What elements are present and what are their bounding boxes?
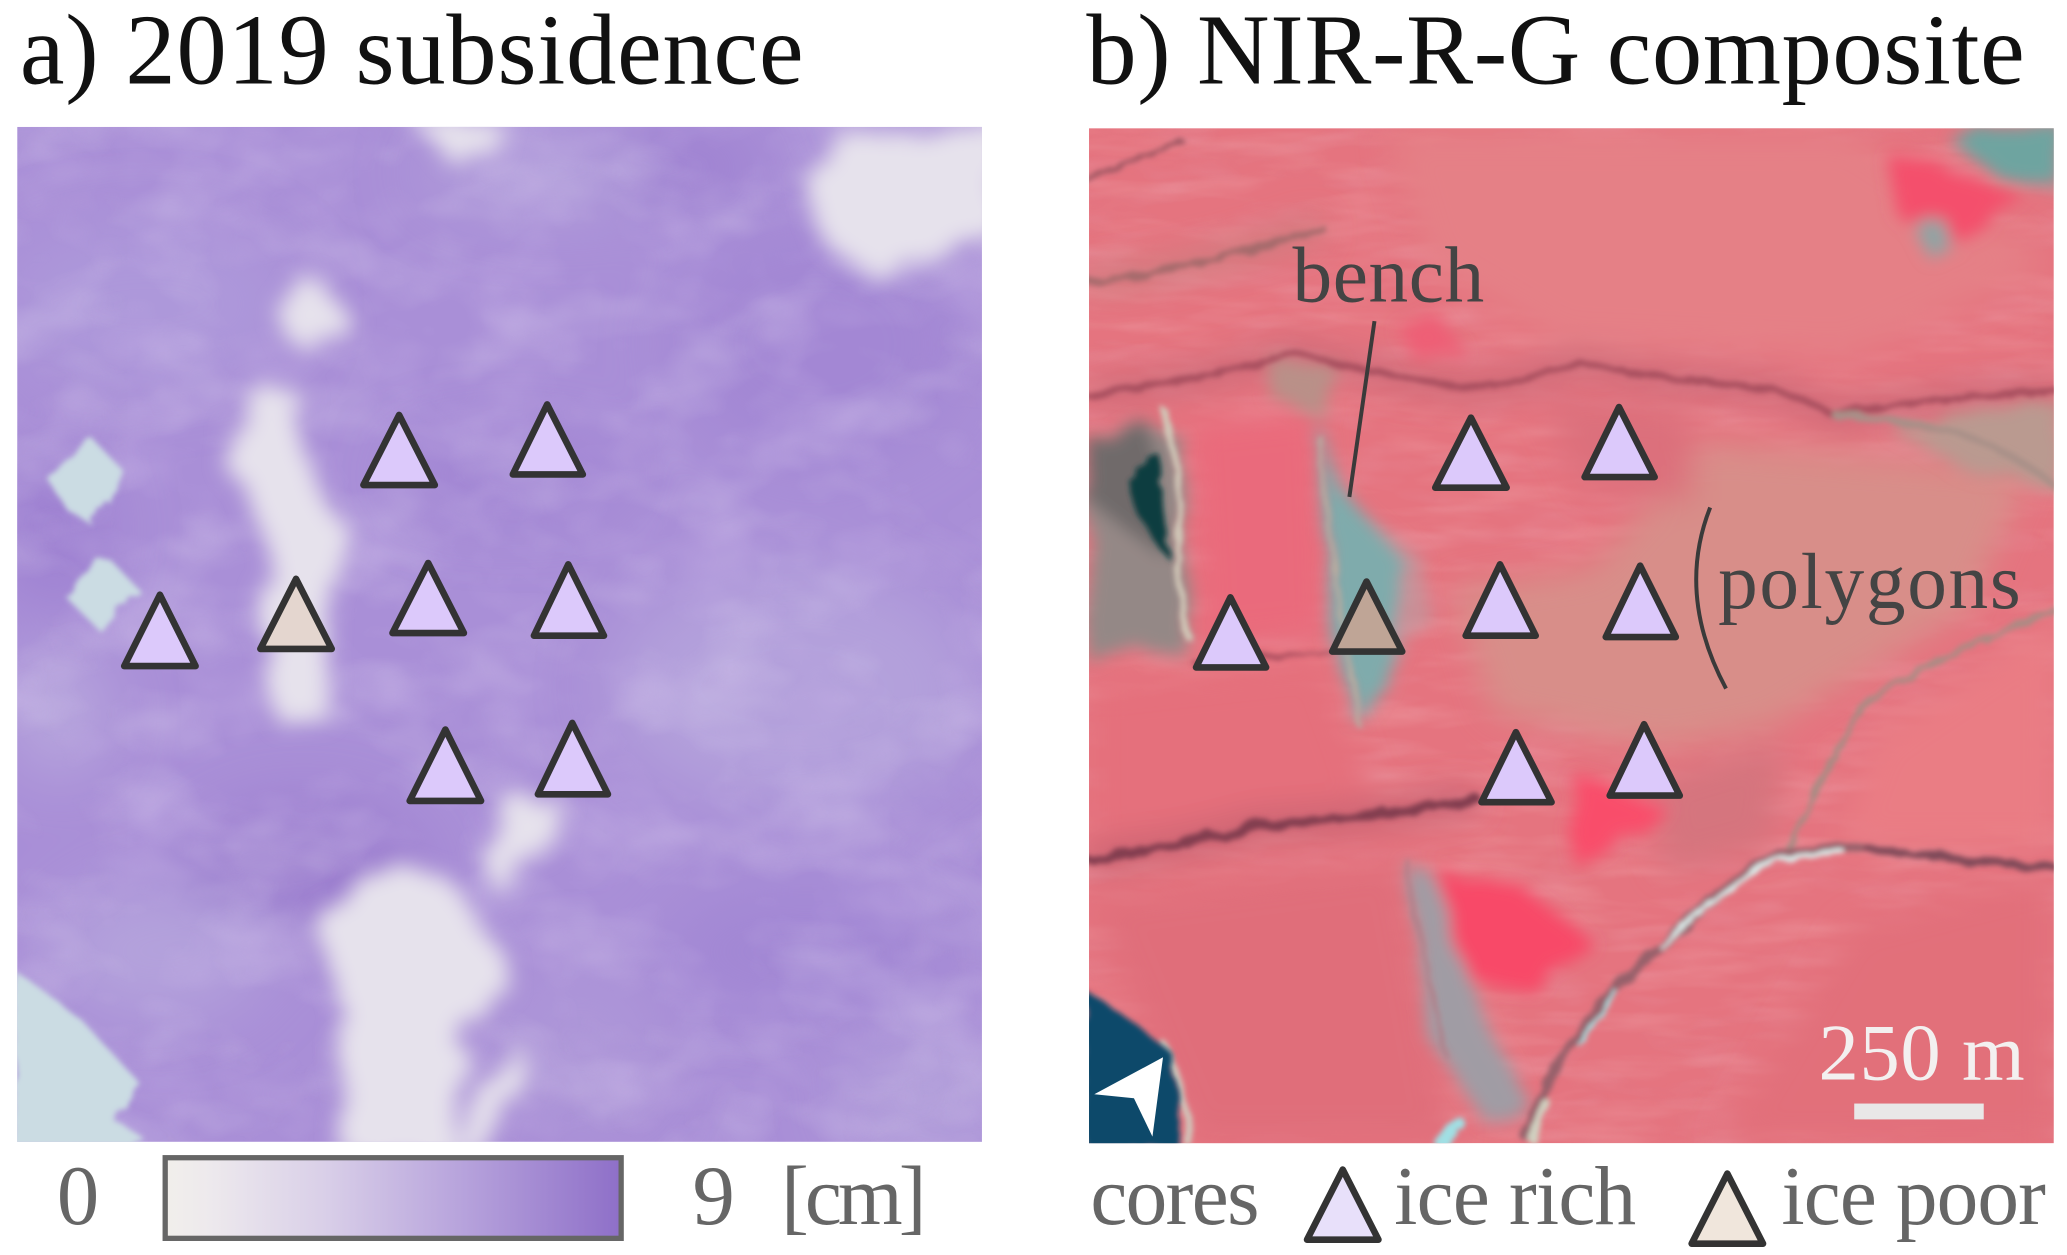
white patch: top right <box>801 106 1004 280</box>
dark band beneath the ridge and lower gully <box>1086 352 2062 415</box>
legend label: ice rich: ice rich <box>1394 1151 1636 1243</box>
colour bar unit: [cm] <box>781 1151 926 1243</box>
drainage lines <box>1086 352 2062 415</box>
white patch: centre knob <box>280 280 349 354</box>
blue patch: upper <box>46 436 122 526</box>
legend label: cores: cores <box>1090 1151 1259 1243</box>
leader line: bench <box>1349 321 1374 497</box>
left degraded zone <box>1089 423 1188 661</box>
label: bench: bench <box>1293 231 1484 319</box>
colour bar <box>165 1158 621 1238</box>
bench feature <box>1348 502 1434 661</box>
scale label: 250 m <box>1819 1009 2025 1098</box>
stream <box>1526 848 1860 1137</box>
white patch: top <box>410 112 496 161</box>
sea corner <box>1084 989 1180 1150</box>
label: polygons: polygons <box>1718 538 2021 626</box>
blue patch: middle <box>66 555 140 630</box>
colour bar label: 9: 9 <box>693 1150 735 1243</box>
salmon polygon zone <box>1454 443 2029 747</box>
lower bench <box>1406 866 1526 1127</box>
white patch: lower right <box>478 793 571 883</box>
triangle markers: panel a <box>124 404 608 801</box>
top right teal water edge <box>1949 119 2062 194</box>
panel: NIR-R-G composite image <box>1084 119 2062 1150</box>
bracket: polygons <box>1696 507 1726 689</box>
legend label: ice poor: ice poor <box>1782 1151 2046 1243</box>
panel: subsidence map <box>0 106 1004 1163</box>
legend icon: ice rich <box>1307 1170 1378 1240</box>
scarp <box>1163 410 1188 637</box>
red patches <box>1438 872 1591 993</box>
ridge band <box>1269 357 1348 416</box>
white patch: central ridge <box>225 383 354 724</box>
icon: north arrow <box>1094 1057 1163 1137</box>
blue patch: lower left <box>13 969 143 1152</box>
triangle markers: panel b <box>1196 407 1680 802</box>
scale bar <box>1854 1104 1984 1119</box>
legend icon: ice poor <box>1692 1174 1763 1244</box>
white patch: bottom <box>317 859 500 1163</box>
lake <box>1130 453 1170 562</box>
colour bar label: 0: 0 <box>57 1150 99 1243</box>
